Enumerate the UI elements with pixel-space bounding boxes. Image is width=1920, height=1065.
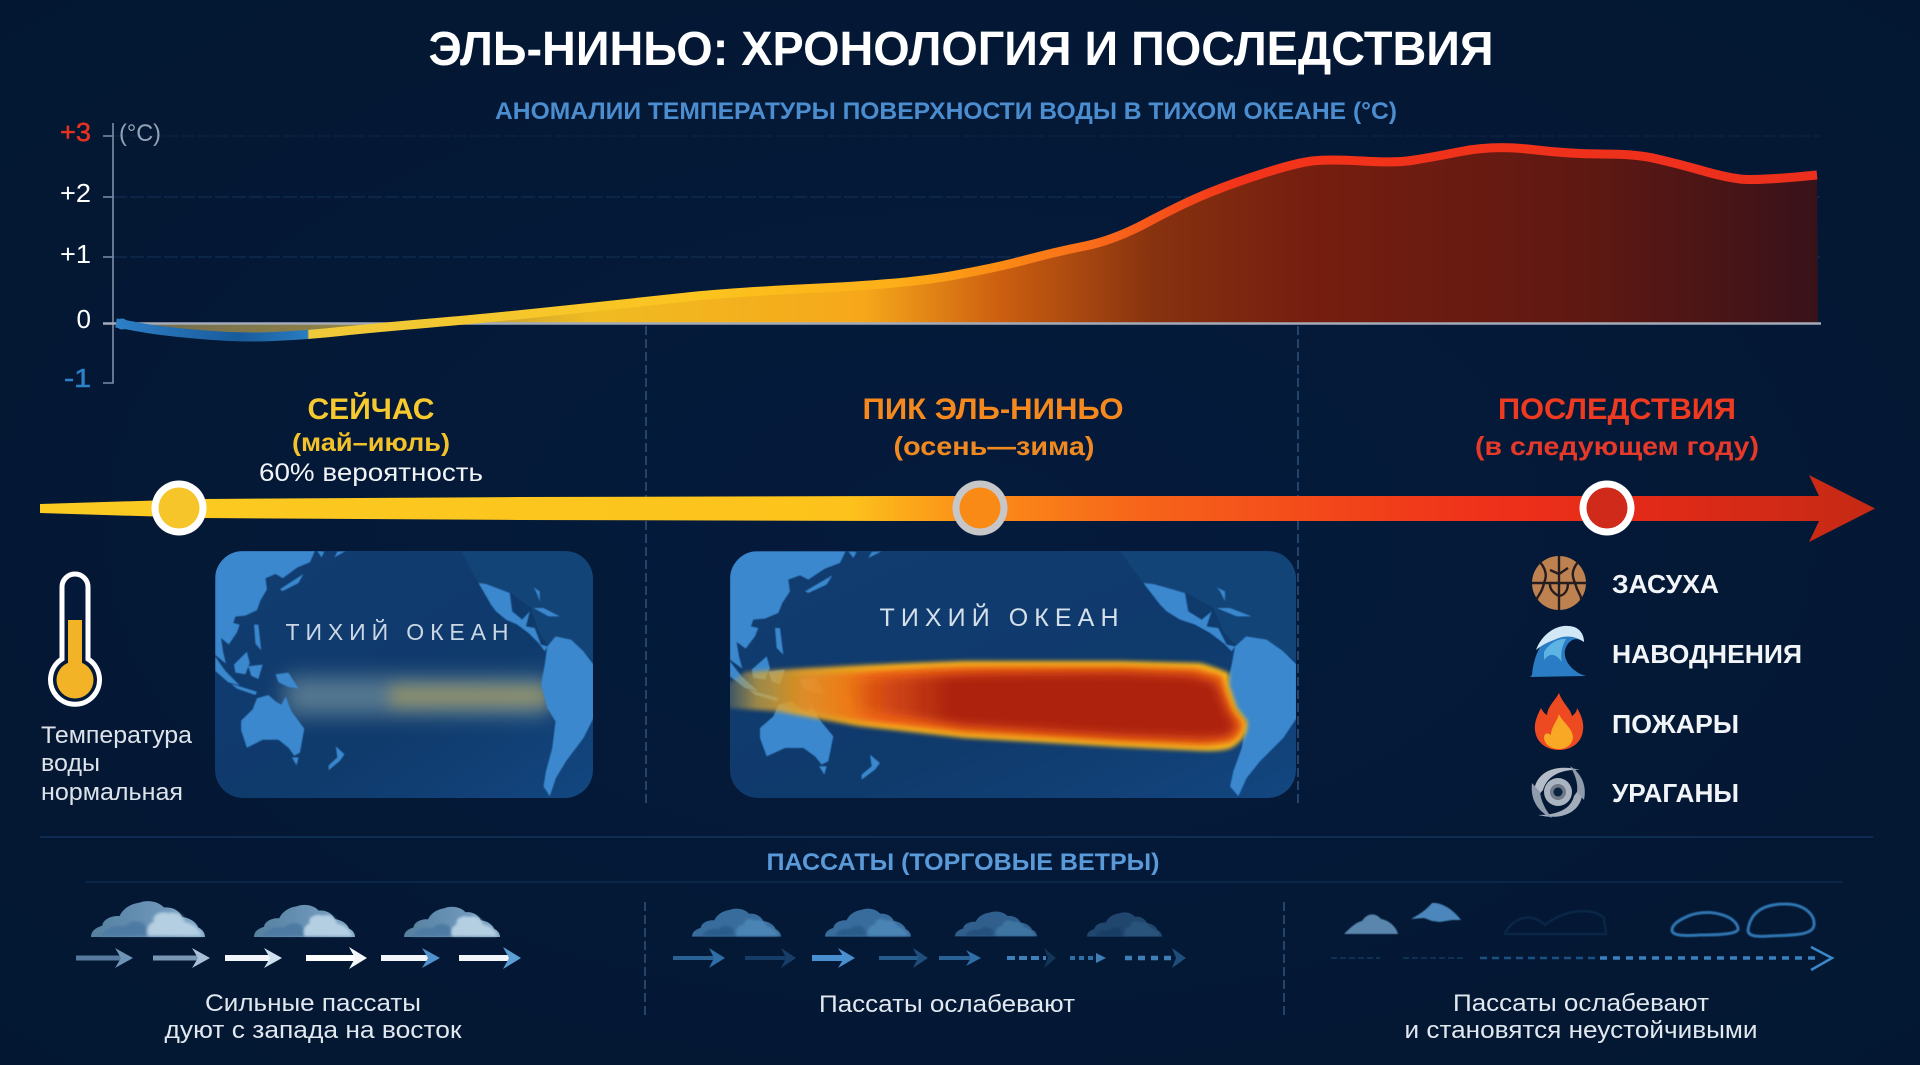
water temperature note: Температура (41, 722, 193, 749)
chart: sea surface temperature anomalies (60, 117, 1821, 393)
caption: Пассаты ослабевают (819, 991, 1075, 1018)
wind arrows (673, 948, 1186, 968)
label: fires: ПОЖАРЫ (1612, 709, 1739, 739)
map: pacific peak (725, 551, 1300, 798)
phase label: peak (862, 393, 1124, 461)
caption: Сильные пассаты (205, 990, 421, 1017)
anomaly curve (116, 148, 1817, 337)
water temperature note (41, 722, 193, 806)
land (730, 551, 1297, 796)
panel: weakening trade winds (673, 909, 1186, 1018)
caption (164, 990, 462, 1044)
map: pacific now (215, 551, 596, 798)
marker: peak (952, 480, 1008, 536)
y axis: +3 (60, 117, 91, 147)
clouds (1344, 903, 1814, 936)
y axis: 0 (77, 304, 91, 334)
trade winds heading: ПАССАТЫ (ТОРГОВЫЕ ВЕТРЫ) (766, 849, 1160, 876)
title: ЭЛЬ-НИНЬО: ХРОНОЛОГИЯ И ПОСЛЕДСТВИЯ (428, 23, 1494, 76)
phase label: peak: ПИК ЭЛЬ-НИНЬО (862, 393, 1124, 426)
phase label: peak: (осень—зима) (894, 431, 1094, 461)
phase label: consequences (1475, 393, 1759, 461)
land (215, 551, 594, 796)
caption: дуют с запада на восток (164, 1017, 462, 1044)
y axis: +2 (60, 178, 91, 208)
y axis: +1 (60, 239, 91, 269)
caption (1404, 990, 1758, 1044)
marker: now (152, 480, 206, 536)
map label: ТИХИЙ ОКЕАН (286, 618, 508, 645)
panel: strong trade winds (76, 901, 521, 1044)
clouds (692, 909, 1162, 937)
phase label: consequences: ПОСЛЕДСТВИЯ (1498, 393, 1736, 426)
icon: thermometer (50, 574, 100, 704)
wind arrows (76, 947, 521, 969)
phase label: now: (май–июль) (292, 429, 450, 457)
el nino warm water plume (725, 661, 1247, 751)
anomaly area (116, 148, 1818, 337)
icon: fire (1535, 693, 1583, 750)
icon: flood wave (1530, 626, 1586, 677)
icon: drought (1532, 556, 1586, 610)
phase label: consequences: (в следующем году) (1475, 431, 1759, 461)
y axis: -1 (64, 363, 91, 393)
clouds (91, 901, 500, 937)
phase label: now (259, 392, 483, 487)
wind arrows (1331, 947, 1832, 970)
timeline arrow (40, 475, 1875, 542)
marker: consequences (1580, 480, 1634, 536)
icon: hurricane (1532, 766, 1585, 818)
y axis (60, 117, 161, 393)
map label: ТИХИЙ ОКЕАН (880, 602, 1118, 632)
caption: и становятся неустойчивыми (1404, 1017, 1758, 1044)
water temperature note: нормальная (41, 779, 183, 806)
y axis: (°C) (119, 120, 161, 147)
label: drought: ЗАСУХА (1612, 569, 1719, 599)
label: floods: НАВОДНЕНИЯ (1612, 639, 1802, 669)
phase label: now: СЕЙЧАС (308, 392, 434, 426)
neutral water band (285, 677, 550, 715)
impacts list (1530, 556, 1802, 818)
panel: unstable trade winds (1331, 903, 1832, 1044)
phase label: now: 60% вероятность (259, 459, 483, 487)
label: hurricanes: УРАГАНЫ (1612, 778, 1739, 808)
chart subtitle: АНОМАЛИИ ТЕМПЕРАТУРЫ ПОВЕРХНОСТИ ВОДЫ В ТИХОМ ОКЕАНЕ (°C) (495, 98, 1397, 125)
caption: Пассаты ослабевают (1453, 990, 1709, 1017)
water temperature note: воды (41, 750, 100, 777)
